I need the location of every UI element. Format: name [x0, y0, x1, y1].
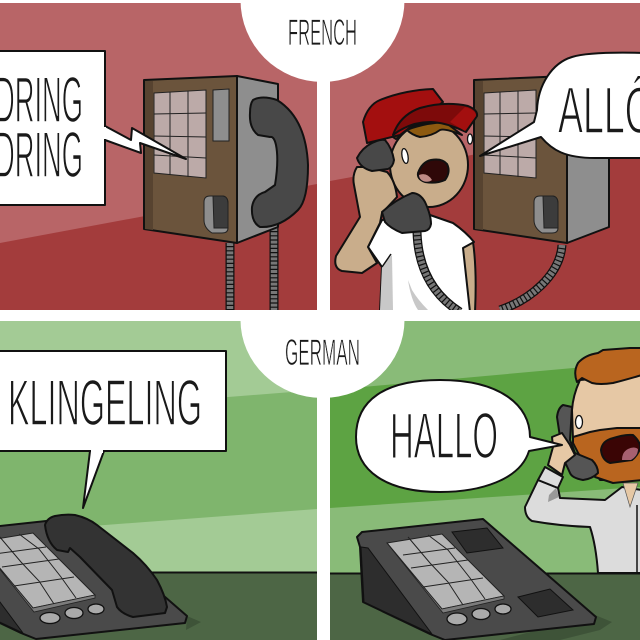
- hair: [393, 122, 462, 139]
- panel: German person answering: [330, 321, 640, 640]
- panel background: [0, 3, 317, 310]
- shirt: [368, 215, 474, 312]
- speech box: DRING DRING: [0, 51, 186, 205]
- panel background: [330, 321, 640, 640]
- handset: [357, 140, 394, 171]
- panel: French phone ringing: [0, 3, 317, 310]
- panel: French person answering: [330, 3, 640, 312]
- label: GERMAN: GERMAN: [285, 332, 360, 373]
- panel: German phone ringing: [0, 321, 317, 640]
- far arm: [462, 242, 476, 312]
- speech box: KLINGELING: [0, 351, 226, 508]
- head: [390, 123, 468, 207]
- neck: [623, 483, 638, 507]
- cap crown: [363, 89, 443, 143]
- speech box: DRING DRING: DRING: [0, 118, 83, 191]
- hand: [548, 433, 575, 475]
- arm: [335, 167, 397, 273]
- eye: [576, 416, 582, 428]
- handset: [557, 405, 598, 480]
- panel background: [330, 3, 640, 310]
- desk phone: [357, 519, 612, 640]
- label: FRENCH: FRENCH: [288, 12, 357, 53]
- speech bubble: ALLÔ: [480, 53, 640, 158]
- beard: [573, 428, 640, 483]
- mouth: [601, 435, 640, 463]
- cap brim: [393, 104, 477, 135]
- wall phone: [474, 76, 609, 310]
- speech box: KLINGELING: KLINGELING: [8, 366, 202, 439]
- wall phone: [144, 76, 308, 310]
- hair: [575, 348, 640, 384]
- mouth: [418, 160, 449, 183]
- label: GERMAN: [240, 320, 404, 398]
- head: [572, 375, 640, 480]
- handset: [45, 515, 167, 617]
- speech box: DRING DRING: DRING: [0, 63, 83, 136]
- shirt and arm: [525, 480, 640, 573]
- desk phone: [0, 515, 201, 639]
- speech bubble: HALLO: HALLO: [390, 399, 498, 472]
- sweat drops: [401, 148, 409, 164]
- speech bubble: HALLO: [356, 380, 562, 492]
- label: FRENCH: [240, 0, 404, 82]
- cuff: [538, 467, 563, 488]
- panel background: [0, 321, 317, 640]
- person with red cap: [335, 89, 477, 312]
- man with beard: [525, 348, 640, 573]
